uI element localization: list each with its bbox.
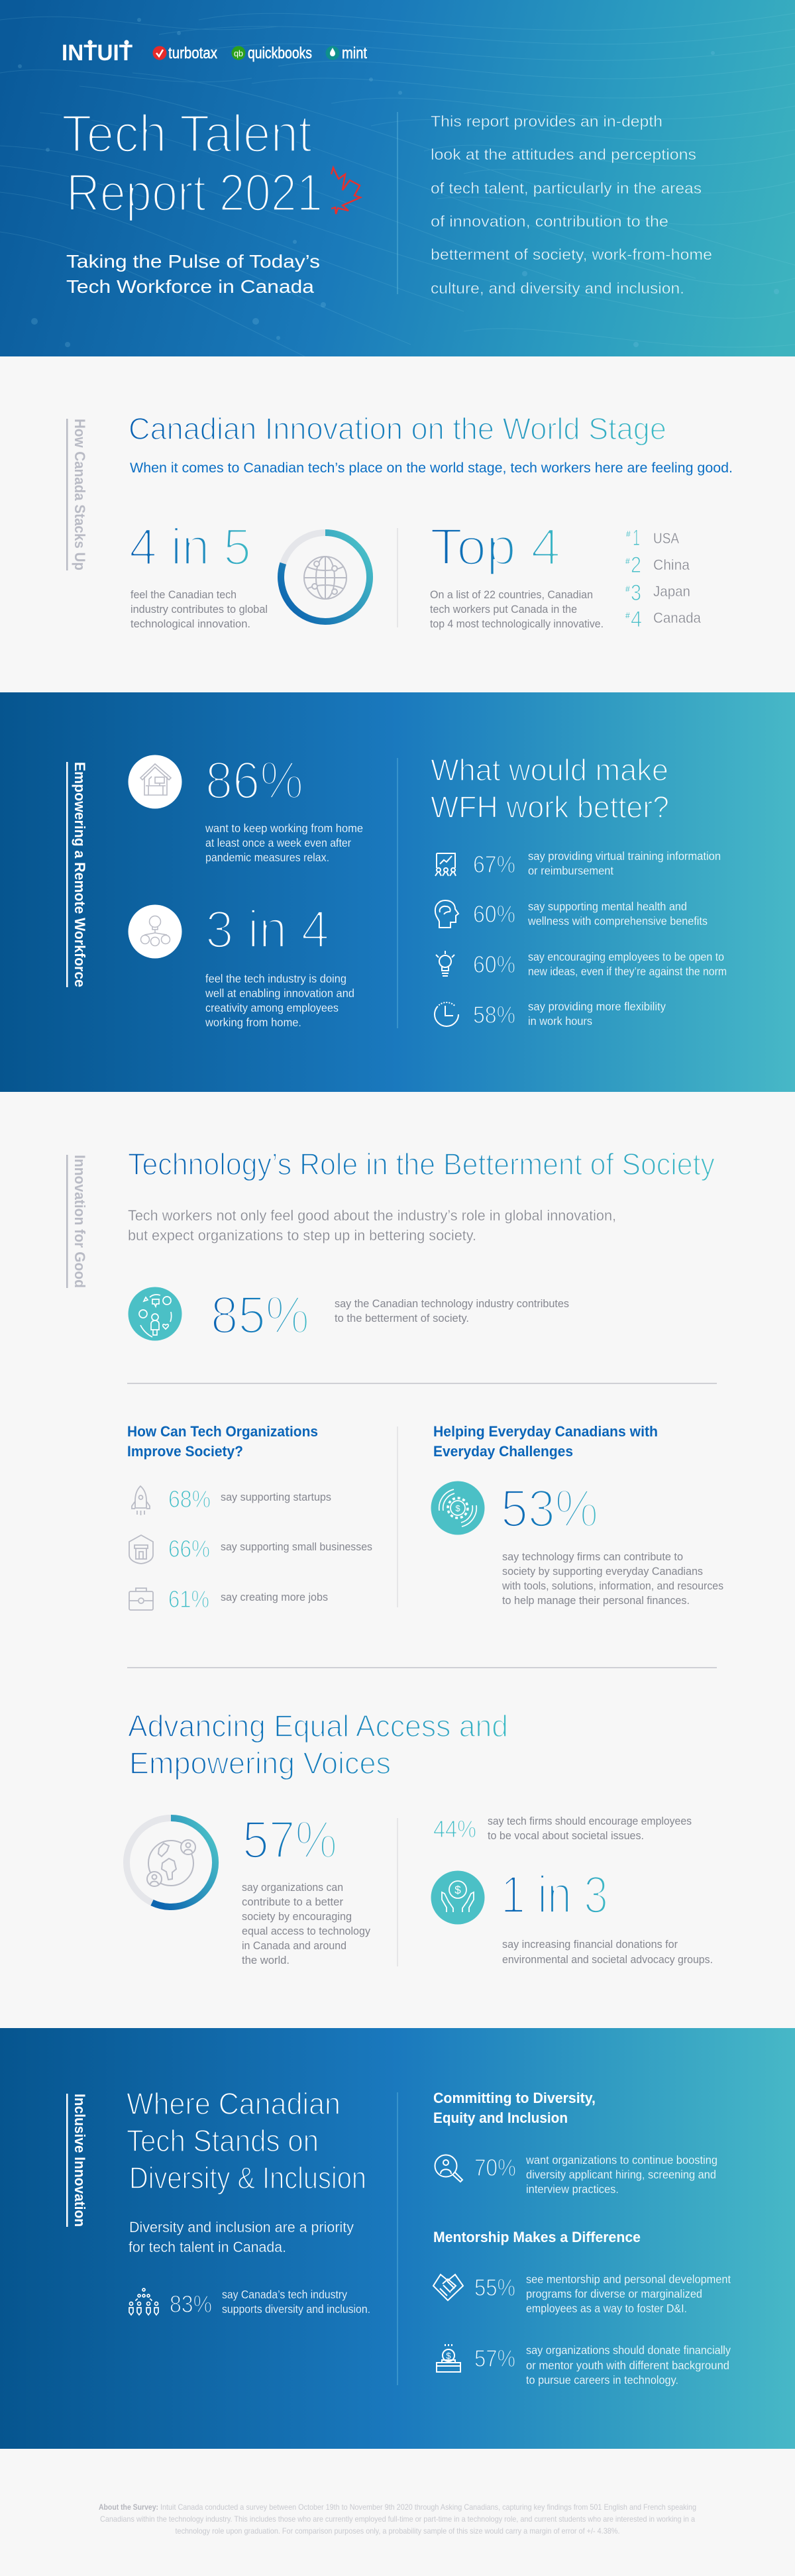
icon: shop badge	[129, 1535, 153, 1564]
text: 4 in 5 description: technological innovation.	[131, 617, 250, 630]
row: 68% startups: 68%	[168, 1485, 211, 1513]
text: 44% description: to be vocal about societal issues.	[488, 1829, 644, 1842]
row: 66% small businesses: say supporting small businesses	[221, 1540, 372, 1553]
logo: mint: mint	[342, 44, 367, 62]
text: 57% description: in Canada and around	[242, 1939, 346, 1952]
text: 57% description: say organizations can	[242, 1881, 343, 1894]
heading: What would make WFH work better?: WFH work better?	[431, 790, 669, 824]
panel: how Canada stacks up	[66, 411, 733, 632]
row: 60% mental health	[435, 900, 708, 928]
footer: about the survey: Intuit Canada conducted a survey between October 19th to November 9th 2020 through Asking Canadians, capturing key findings from 501 English and French speaking	[160, 2502, 696, 2512]
list: country ranking: 1	[633, 525, 640, 551]
row: 55% mentorship: see mentorship and personal development	[526, 2273, 731, 2286]
list: country ranking: #	[625, 584, 630, 594]
row: 61% jobs	[129, 1585, 328, 1613]
icon: hands and coin	[431, 1871, 485, 1924]
intro text: Tech workers not only feel good about the industry’s role in global innovation,	[128, 1207, 616, 1224]
row: 60% new ideas: say encouraging employees to be open to	[528, 950, 724, 963]
column: how can tech organizations improve society	[127, 1423, 372, 1613]
icon: handshake	[433, 2275, 463, 2300]
list: country ranking: 4	[631, 607, 642, 632]
stat: Top 4: Top 4	[430, 517, 560, 576]
stat: 1 in 3: 1 in 3	[501, 1865, 608, 1924]
subheading: Committing to Diversity, Equity and Inclusion: Equity and Inclusion	[433, 2110, 568, 2126]
row: 60% new ideas: new ideas, even if they’re against the norm	[528, 965, 727, 978]
text: 3 in 4 description: working from home.	[205, 1016, 301, 1029]
text: 44% description	[488, 1815, 692, 1842]
subheading	[433, 1423, 658, 1460]
intro text: look at the attitudes and perceptions	[431, 146, 696, 163]
icon: light bulb	[436, 951, 454, 976]
icon: ideas and people	[129, 905, 182, 958]
intro text: for tech talent in Canada.	[129, 2239, 286, 2255]
logo: turbotax: turbotax	[168, 44, 217, 62]
row: 57% donate or mentor: to pursue careers in technology.	[526, 2373, 678, 2387]
stat: 3 in 4: 3 in 4	[205, 900, 329, 959]
row: 68% startups: say supporting startups	[221, 1491, 331, 1503]
heading: Where Canadian	[127, 2086, 341, 2121]
logo: turbotax	[152, 44, 217, 62]
text: 57% description	[242, 1881, 370, 1966]
heading: What would make WFH work better?	[431, 753, 669, 824]
row: 55% mentorship: programs for diverse or marginalized	[526, 2287, 702, 2300]
subheading: Improve Society?	[127, 1443, 243, 1460]
side label: Innovation for Good: Innovation for Good	[72, 1155, 88, 1288]
list: country ranking: 3	[631, 580, 641, 606]
heading: Advancing Equal Access and Empowering Voices: Empowering Voices	[129, 1746, 391, 1780]
logo: quickbooks: qb	[234, 48, 243, 58]
list: country ranking	[625, 525, 702, 632]
intro text: of innovation, contribution to the	[431, 213, 668, 230]
side label: How Canada Stacks Up: How Canada Stacks Up	[72, 419, 88, 570]
text: 53% description	[502, 1550, 723, 1607]
row: 55% mentorship	[433, 2273, 731, 2315]
panel: innovation for good	[66, 1147, 723, 1966]
text: 86% description: want to keep working from home	[205, 822, 363, 835]
intro text	[431, 113, 712, 297]
row: 60% mental health: say supporting mental health and	[528, 900, 687, 913]
intro text: Diversity and inclusion are a priority	[129, 2219, 354, 2235]
text: 85% description	[335, 1297, 569, 1324]
intro text	[128, 1207, 616, 1244]
text: 44% description: say tech firms should encourage employees	[488, 1815, 692, 1827]
footer: about the survey	[99, 2502, 696, 2536]
title: Report 2021	[66, 163, 323, 222]
list: country ranking: China	[653, 557, 690, 573]
panel: header	[0, 0, 795, 356]
icon: globe and people	[147, 1840, 195, 1886]
text: 4 in 5 description: feel the Canadian tech	[131, 588, 237, 601]
stat: 85%: 85%	[211, 1285, 309, 1344]
icon: money gear: $	[455, 1503, 460, 1513]
logo: intuit: INTUIT	[62, 40, 132, 66]
text: 85% description: to the betterment of society.	[335, 1312, 469, 1324]
row: 68% startups	[132, 1485, 331, 1515]
icon: training chart	[435, 853, 456, 876]
stat: 44%: 44%	[433, 1815, 476, 1843]
side label: Inclusive Innovation: Inclusive Innovation	[72, 2094, 88, 2227]
heading: Diversity & Inclusion	[129, 2161, 366, 2195]
text: 57% description: the world.	[242, 1954, 290, 1966]
row: 57% donate or mentor: $	[446, 2351, 451, 2361]
chart: 80 percent ring	[281, 533, 370, 621]
text: 57% description: society by encouraging	[242, 1910, 352, 1923]
subtitle: Tech Workforce in Canada	[66, 276, 314, 297]
icon: maple leaf	[331, 168, 360, 214]
heading: Advancing Equal Access and Empowering Voices: Advancing Equal Access and	[128, 1709, 508, 1743]
intro text: but expect organizations to step up in bettering society.	[128, 1227, 476, 1244]
subheading: Helping Everyday Canadians with	[433, 1423, 658, 1440]
text: 3 in 4 description: creativity among employees	[205, 1001, 339, 1014]
stat: 57%: 57%	[242, 1810, 337, 1869]
icon: head	[435, 900, 458, 928]
icon: globe	[304, 557, 346, 599]
row: 67% virtual training: 67%	[473, 851, 515, 878]
footer: about the survey: Canadians within the technology industry. This includes those who are currently employed full-time or part-time in a technology role, and current students who are interested in working in a	[100, 2514, 695, 2524]
column: helping everyday Canadians	[431, 1423, 723, 1607]
row: 70% diversity hiring	[435, 2153, 717, 2196]
intro text: culture, and diversity and inclusion.	[431, 280, 684, 297]
logo: quickbooks: quickbooks	[248, 44, 312, 62]
footer: about the survey: technology role upon graduation. For comparison purposes only, a probability sample of this size would carry a margin of error of +/- 4.38%.	[175, 2526, 620, 2536]
row: 57% donate or mentor: say organizations should donate financially	[526, 2343, 731, 2357]
row: 67% virtual training	[435, 849, 721, 878]
row: 55% mentorship: employees as a way to foster D&I.	[526, 2302, 687, 2315]
row: 83% supports diversity: say Canada’s tech industry	[222, 2288, 347, 2301]
text: 57% description: contribute to a better	[242, 1896, 343, 1908]
text: 85% description: say the Canadian technology industry contributes	[335, 1297, 569, 1310]
text: Top 4 description	[430, 588, 604, 630]
row: 70% diversity hiring: 70%	[474, 2154, 516, 2181]
stat: 4 in 5: 4 in 5	[129, 517, 251, 576]
text: 3 in 4 description: feel the tech industry is doing	[205, 972, 346, 985]
intro sentence: When it comes to Canadian tech’s place on the world stage, tech workers here are feeling good.	[130, 460, 733, 476]
panel: empowering a remote workforce	[0, 692, 795, 1092]
row: 58% flexibility: in work hours	[528, 1014, 592, 1028]
intro text: of tech talent, particularly in the areas	[431, 180, 702, 197]
list: country ranking: Japan	[653, 583, 690, 600]
footer: about the survey: About the Survey:	[99, 2502, 158, 2512]
subheading: Everyday Challenges	[433, 1443, 573, 1460]
text: 4 in 5 description	[131, 588, 268, 630]
row: 70% diversity hiring: want organizations to continue boosting	[525, 2153, 717, 2167]
row: 61% jobs: 61%	[168, 1585, 209, 1613]
icon: donation box	[437, 2344, 460, 2372]
text: 53% description: to help manage their personal finances.	[502, 1594, 690, 1607]
text: 86% description	[205, 822, 363, 864]
text: Top 4 description: tech workers put Canada in the	[430, 603, 577, 616]
icon: community	[129, 1287, 182, 1341]
row: 57% donate or mentor	[437, 2343, 731, 2387]
stat: 53%: 53%	[501, 1479, 598, 1538]
row: 58% flexibility: 58%	[473, 1001, 515, 1028]
text: 53% description: with tools, solutions, information, and resources	[502, 1580, 723, 1592]
row: 57% donate or mentor: or mentor youth with different background	[526, 2359, 729, 2372]
logo: quickbooks	[232, 44, 312, 62]
row: 67% virtual training: say providing virtual training information	[528, 849, 721, 863]
list: country ranking: 2	[631, 553, 641, 578]
text: 53% description: society by supporting everyday Canadians	[502, 1565, 703, 1578]
title	[62, 104, 323, 222]
row: 83% supports diversity	[129, 2288, 370, 2318]
row: 60% new ideas	[436, 950, 727, 978]
side label: Empowering a Remote Workforce: Empowering a Remote Workforce	[72, 762, 88, 987]
subheading: Mentorship Makes a Difference: Mentorship Makes a Difference	[433, 2229, 641, 2245]
subheading: Committing to Diversity, Equity and Inclusion	[433, 2090, 596, 2126]
list: country ranking: Canada	[653, 610, 702, 626]
subtitle: Taking the Pulse of Today’s	[66, 251, 320, 272]
text: 1 in 3 description: say increasing financial donations for	[502, 1938, 678, 1951]
text: Top 4 description: top 4 most technologically innovative.	[430, 617, 604, 630]
icon: briefcase	[129, 1588, 153, 1610]
list: country ranking: #	[626, 529, 631, 539]
subtitle	[66, 251, 320, 297]
row: 55% mentorship: 55%	[474, 2274, 515, 2301]
intro text: betterment of society, work-from-home	[431, 246, 712, 263]
text: 86% description: at least once a week even after	[205, 836, 351, 849]
icon: magnifier	[435, 2155, 462, 2182]
text: 4 in 5 description: industry contributes to global	[131, 603, 268, 616]
heading: Advancing Equal Access and Empowering Voices	[128, 1709, 508, 1780]
list: country ranking: #	[625, 557, 630, 566]
icon: money gear	[431, 1481, 485, 1534]
intro text	[129, 2219, 354, 2255]
chart: 57 percent ring	[127, 1818, 215, 1907]
logo: mint	[326, 44, 367, 62]
text: 86% description: pandemic measures relax.	[205, 851, 329, 864]
text: 57% description: equal access to technology	[242, 1925, 370, 1937]
intro text: This report provides an in-depth	[431, 113, 662, 130]
row: 67% virtual training: or reimbursement	[528, 864, 613, 877]
text: Top 4 description: On a list of 22 countries, Canadian	[430, 588, 593, 601]
row: 70% diversity hiring: diversity applicant hiring, screening and	[526, 2168, 716, 2181]
icon: group of people	[129, 2288, 158, 2315]
row: 60% mental health: 60%	[473, 900, 515, 928]
text: 53% description: say technology firms can contribute to	[502, 1550, 683, 1563]
row: 66% small businesses	[129, 1535, 372, 1564]
list: country ranking: USA	[653, 530, 679, 547]
icon: home office	[129, 755, 182, 808]
text: 3 in 4 description	[205, 972, 354, 1029]
heading: Canadian Innovation on the World Stage	[129, 411, 666, 446]
row: 60% mental health: wellness with comprehensive benefits	[527, 914, 708, 928]
icon: clock	[435, 1002, 458, 1026]
list: country ranking: #	[625, 611, 630, 620]
text: 3 in 4 description: well at enabling innovation and	[205, 987, 354, 1000]
stat: 86%: 86%	[205, 751, 303, 810]
heading	[127, 2086, 366, 2195]
row: 58% flexibility: say providing more flexibility	[528, 1000, 666, 1013]
icon: hands and coin: $	[454, 1884, 461, 1896]
heading: Tech Stands on	[127, 2123, 319, 2158]
heading: Technology’s Role in the Betterment of Society	[128, 1147, 715, 1181]
heading: What would make WFH work better?: What would make	[431, 753, 668, 787]
row: 66% small businesses: 66%	[168, 1535, 210, 1562]
row: 58% flexibility	[435, 1000, 666, 1028]
text: 1 in 3 description: environmental and societal advocacy groups.	[502, 1953, 713, 1966]
row: 83% supports diversity: 83%	[170, 2290, 212, 2318]
subheading	[127, 1423, 318, 1460]
row: 57% donate or mentor: 57%	[474, 2345, 515, 2372]
row: 70% diversity hiring: interview practices.	[526, 2182, 619, 2196]
row: 61% jobs: say creating more jobs	[221, 1591, 328, 1603]
title: Tech Talent	[62, 104, 312, 163]
icon: rocket	[132, 1486, 150, 1515]
text: 1 in 3 description	[502, 1938, 713, 1966]
row: 83% supports diversity: supports diversity and inclusion.	[222, 2302, 370, 2316]
subheading: Committing to Diversity, Equity and Inclusion: Committing to Diversity,	[433, 2090, 596, 2106]
subheading: How Can Tech Organizations	[127, 1423, 318, 1440]
panel: inclusive innovation	[0, 2028, 795, 2449]
row: 60% new ideas: 60%	[473, 951, 515, 978]
